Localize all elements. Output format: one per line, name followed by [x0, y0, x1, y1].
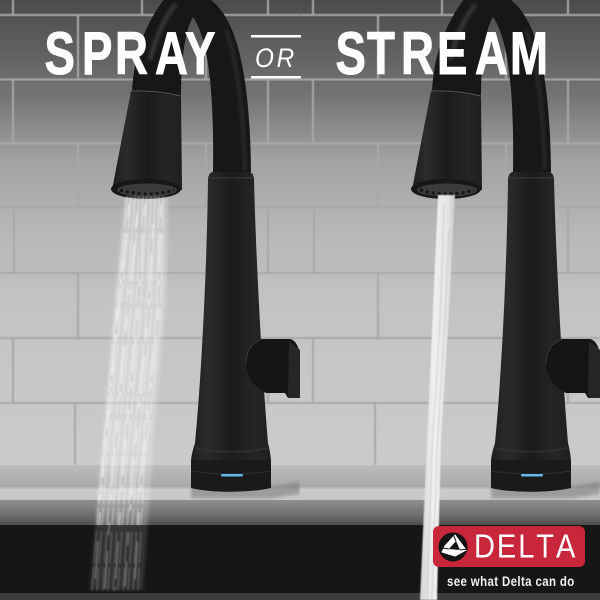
icon: Delta mark	[438, 532, 468, 562]
divider: OR	[251, 35, 301, 78]
left panel: spray faucet scene	[0, 0, 300, 600]
right panel: stream faucet scene	[300, 0, 600, 600]
stream water	[420, 195, 455, 600]
logo: Delta	[433, 526, 585, 567]
spray water	[84, 197, 168, 593]
tagline: see what Delta can do	[447, 573, 575, 589]
divider: OR: OR	[255, 44, 297, 73]
logo wordmark: DELTA	[474, 528, 577, 565]
logo badge	[433, 526, 585, 567]
title: SPRAY: SPRAY	[45, 21, 215, 88]
title: STREAM: STREAM	[335, 21, 548, 88]
